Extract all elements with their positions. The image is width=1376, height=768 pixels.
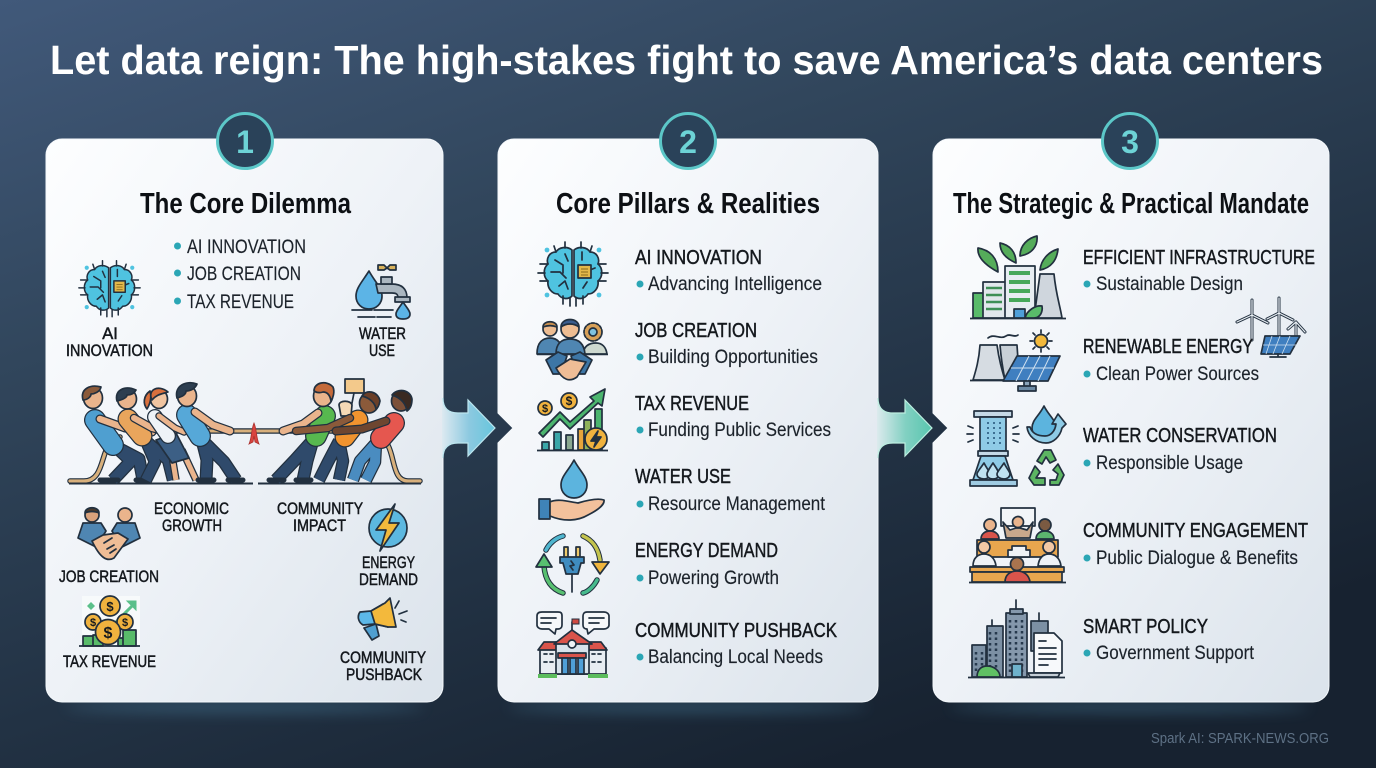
right rope tail bbox=[378, 437, 420, 481]
item: renewable energy: RENEWABLE ENERGY bbox=[1083, 336, 1253, 358]
icon: AI brain bbox=[79, 261, 140, 317]
red ribbon bbox=[249, 423, 259, 444]
panel 1 heading: The Core Dilemma bbox=[140, 188, 352, 220]
icon: tax revenue growth: $ bbox=[542, 403, 548, 415]
panel 3 card bbox=[933, 139, 1329, 702]
main rope bbox=[150, 428, 340, 434]
pillar: energy demand: ENERGY DEMAND bbox=[635, 540, 778, 562]
person 1 bbox=[82, 386, 152, 480]
item: renewable energy bbox=[1083, 336, 1259, 385]
label: community pushback: COMMUNITY bbox=[340, 649, 426, 667]
label: community impact bbox=[277, 500, 363, 535]
item: efficient infrastructure bbox=[1083, 247, 1315, 295]
label: community impact: IMPACT bbox=[293, 517, 346, 535]
pillar: water use bbox=[635, 466, 826, 515]
label: tax revenue: TAX REVENUE bbox=[63, 653, 156, 671]
person 6 with protest sign bbox=[296, 379, 380, 480]
icon: cooling towers and solar bbox=[970, 330, 1060, 391]
label: energy demand: DEMAND bbox=[359, 571, 418, 589]
panel: strategic and practical mandate bbox=[933, 114, 1329, 702]
tug of war illustration bbox=[69, 379, 421, 484]
icon: tax revenue coins: $ bbox=[122, 617, 128, 629]
label: water use: WATER bbox=[359, 325, 406, 343]
step badge 2: 2 bbox=[679, 124, 697, 160]
label: economic growth: ECONOMIC bbox=[154, 500, 229, 518]
pillar: AI innovation: Advancing Intelligence bbox=[648, 274, 822, 295]
label: AI innovation bbox=[66, 325, 153, 360]
step badge 3 bbox=[1102, 114, 1158, 168]
panel 1 bullet list: AI INNOVATION bbox=[187, 237, 306, 258]
pillar: water use: Resource Management bbox=[648, 494, 826, 515]
panel 2 card bbox=[498, 139, 878, 702]
label: water use: USE bbox=[369, 342, 395, 360]
title: Let data reign: The high-stakes fight to save America’s data centers bbox=[50, 37, 1323, 83]
pillar: job creation: Building Opportunities bbox=[648, 347, 818, 368]
pillar: AI innovation: AI INNOVATION bbox=[635, 247, 762, 269]
icon: handshake small bbox=[78, 508, 140, 559]
item: water conservation: WATER CONSERVATION bbox=[1083, 425, 1277, 447]
pillar: water use: WATER USE bbox=[635, 466, 731, 488]
label: AI innovation: AI bbox=[102, 325, 118, 343]
icon: wind turbines and solar panel bbox=[1237, 298, 1305, 357]
pillar: AI innovation bbox=[635, 247, 822, 295]
label: AI innovation: INNOVATION bbox=[66, 342, 153, 360]
label: community pushback: PUSHBACK bbox=[346, 666, 422, 684]
pillar: energy demand: Powering Growth bbox=[648, 568, 779, 589]
icon: water drop on hand bbox=[539, 460, 604, 520]
icon: energy bolt bbox=[369, 504, 407, 551]
source credit: Spark AI: SPARK-NEWS.ORG bbox=[1151, 730, 1329, 747]
icon: AI brain bbox=[538, 242, 608, 306]
icon: tax revenue coins bbox=[79, 596, 140, 646]
pillar: community pushback bbox=[635, 620, 838, 668]
item: smart policy: Government Support bbox=[1096, 643, 1255, 664]
label: energy demand: ENERGY bbox=[362, 554, 415, 572]
label: economic growth bbox=[154, 500, 229, 535]
icon: city and policy document bbox=[968, 600, 1065, 678]
item: efficient infrastructure: EFFICIENT INFRASTRUCTURE bbox=[1083, 247, 1315, 269]
icon: community meeting bbox=[969, 508, 1066, 582]
arrow: panel 1 to panel 2 bbox=[442, 398, 495, 458]
pillar: job creation: JOB CREATION bbox=[635, 320, 757, 342]
icon: water conservation bbox=[967, 406, 1066, 486]
icon: water tap bbox=[352, 265, 410, 319]
label: job creation: JOB CREATION bbox=[59, 568, 159, 586]
person 2 bbox=[116, 388, 173, 480]
item: water conservation bbox=[1083, 425, 1277, 474]
left rope tail bbox=[70, 437, 120, 481]
step badge 1 bbox=[218, 114, 272, 168]
pillar: community pushback: COMMUNITY PUSHBACK bbox=[635, 620, 838, 642]
person 4 bbox=[177, 383, 243, 480]
panel 2 heading: Core Pillars & Realities bbox=[556, 188, 820, 220]
pillar: tax revenue: Funding Public Services bbox=[648, 420, 831, 441]
item: smart policy: SMART POLICY bbox=[1083, 616, 1208, 638]
icon: energy cycle plug bbox=[536, 536, 609, 593]
pillar: job creation bbox=[635, 320, 818, 368]
panel: core pillars and realities bbox=[498, 114, 878, 702]
panel 1 bullet list bbox=[174, 237, 306, 313]
item: community engagement bbox=[1083, 520, 1308, 569]
icon: tax revenue coins: $ bbox=[104, 625, 113, 642]
panel 1 bullet list: TAX REVENUE bbox=[187, 292, 294, 313]
item: community engagement: Public Dialogue & Benefits bbox=[1096, 548, 1298, 569]
step badge 1: 1 bbox=[236, 124, 254, 160]
panel 1 bullet list: JOB CREATION bbox=[187, 264, 301, 285]
item: smart policy bbox=[1083, 616, 1255, 664]
person 5 bbox=[269, 383, 334, 480]
pillar: tax revenue bbox=[635, 393, 831, 441]
label: community pushback bbox=[340, 649, 426, 684]
label: water use bbox=[359, 325, 406, 360]
icon: megaphone bbox=[358, 598, 407, 640]
item: efficient infrastructure: Sustainable Design bbox=[1096, 274, 1243, 295]
icon: tax revenue coins: $ bbox=[90, 617, 96, 629]
item: community engagement: COMMUNITY ENGAGEMENT bbox=[1083, 520, 1308, 542]
arrow: panel 2 to panel 3 bbox=[877, 398, 932, 458]
panel 1 card bbox=[46, 139, 443, 702]
label: community impact: COMMUNITY bbox=[277, 500, 363, 518]
icon: tax revenue growth: $ bbox=[566, 394, 573, 408]
pillar: energy demand bbox=[635, 540, 779, 589]
step badge 2 bbox=[660, 114, 716, 168]
person 7 bbox=[336, 390, 412, 480]
step badge 3: 3 bbox=[1121, 124, 1139, 160]
pillar: tax revenue: TAX REVENUE bbox=[635, 393, 749, 415]
ground bbox=[69, 482, 421, 484]
panel: the core dilemma bbox=[46, 114, 443, 702]
item: renewable energy: Clean Power Sources bbox=[1096, 364, 1259, 385]
item: water conservation: Responsible Usage bbox=[1096, 453, 1243, 474]
label: economic growth: GROWTH bbox=[162, 517, 222, 535]
icon: tax revenue growth bbox=[537, 389, 608, 450]
icon: green building bbox=[970, 236, 1066, 318]
icon: tax revenue coins: $ bbox=[106, 599, 114, 614]
icon: job creation team bbox=[537, 320, 608, 380]
person 3 bbox=[144, 388, 196, 480]
pillar: community pushback: Balancing Local Needs bbox=[648, 647, 823, 668]
label: energy demand bbox=[359, 554, 418, 589]
icon: town hall bbox=[537, 612, 609, 676]
